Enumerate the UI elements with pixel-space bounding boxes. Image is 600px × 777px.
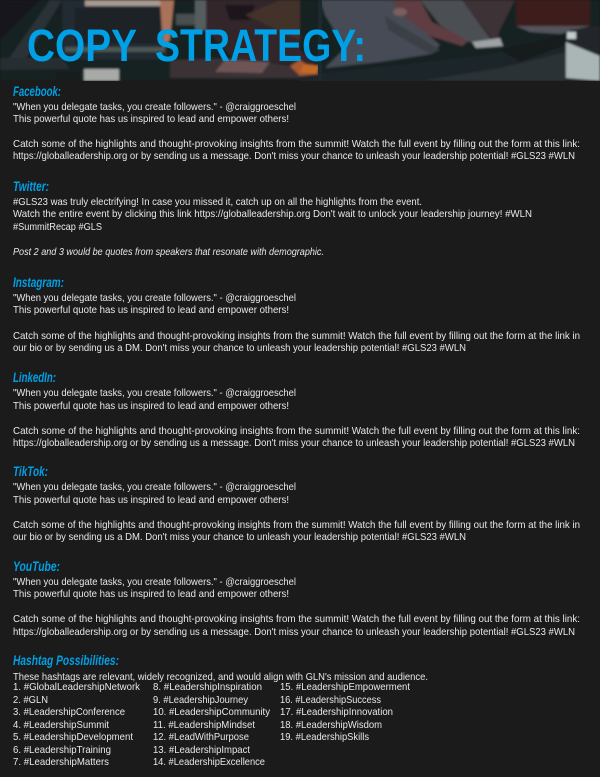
section: TikTok: "When you delegate tasks, you create followers." - @craiggroeschel — [13, 482, 296, 493]
hashtag list: column 2: 11. #LeadershipMindset — [153, 720, 255, 731]
hashtag list: column 2 — [153, 682, 271, 768]
section: Instagram: Catch some of the highlights and thought-provoking insights from the summit! Watch the full event by filling out the form at the link in — [13, 331, 580, 342]
section: Twitter: Twitter: — [13, 178, 49, 194]
section: hashtag possibilities — [13, 652, 428, 768]
section: Instagram: "When you delegate tasks, you create followers." - @craiggroeschel — [13, 293, 296, 304]
hashtag list: column 2: 12. #LeadWithPurpose — [153, 732, 249, 743]
hashtag list: column 1: 5. #LeadershipDevelopment — [13, 732, 133, 743]
section: Instagram — [13, 274, 580, 354]
section: TikTok: our bio or by sending us a DM. Don't miss your chance to unleash your leadership potential! #GLS23 #WLN — [13, 532, 466, 543]
section: Facebook: This powerful quote has us inspired to lead and empower others! — [13, 114, 289, 125]
section: Twitter: #GLS23 was truly electrifying! In case you missed it, catch up on all the highlights from the event. — [13, 197, 422, 208]
section: LinkedIn: "When you delegate tasks, you create followers." - @craiggroeschel — [13, 388, 296, 399]
section: Twitter — [13, 178, 532, 258]
title: STRATEGY: — [155, 20, 366, 71]
section: LinkedIn: LinkedIn: — [13, 369, 56, 385]
section: LinkedIn — [13, 369, 580, 449]
header: aerial city photo — [0, 0, 600, 81]
hashtag list: column 1: 3. #LeadershipConference — [13, 707, 125, 718]
section: YouTube: YouTube: — [13, 558, 60, 574]
hashtag list: column 2: 14. #LeadershipExcellence — [153, 757, 265, 768]
section: Facebook: Catch some of the highlights and thought-provoking insights from the summit! Watch the full event by filling out the form at this link: — [13, 139, 580, 150]
section: TikTok: TikTok: — [13, 463, 48, 479]
title: COPY — [27, 20, 137, 71]
section: YouTube: https://globalleadership.org or by sending us a message. Don't miss your chance to unleash your leadership potential! #GLS23 #WLN — [13, 627, 575, 638]
hashtag list: column 3: 17. #LeadershipInnovation — [280, 707, 393, 718]
section: Instagram: our bio or by sending us a DM. Don't miss your chance to unleash your leadership potential! #GLS23 #WLN — [13, 343, 466, 354]
hashtag list: column 1: 6. #LeadershipTraining — [13, 745, 111, 756]
section: Instagram: Instagram: — [13, 274, 64, 290]
section: YouTube: This powerful quote has us inspired to lead and empower others! — [13, 589, 289, 600]
hashtag list: column 1: 7. #LeadershipMatters — [13, 757, 109, 768]
section: YouTube: "When you delegate tasks, you create followers." - @craiggroeschel — [13, 577, 296, 588]
section: Facebook: "When you delegate tasks, you create followers." - @craiggroeschel — [13, 102, 296, 113]
section: LinkedIn: https://globalleadership.org or by sending us a message. Don't miss your chance to unleash your leadership potential! #GLS23 #WLN — [13, 438, 575, 449]
section: TikTok: This powerful quote has us inspired to lead and empower others! — [13, 495, 289, 506]
section: Twitter: #SummitRecap #GLS — [13, 222, 102, 233]
section: Facebook: https://globalleadership.org or by sending us a message. Don't miss your chance to unleash your leadership potential! #GLS23 #WLN — [13, 151, 575, 162]
section: Twitter: Watch the entire event by clicking this link https://globalleadership.org Don't wait to unlock your leadership journey! #WLN — [13, 209, 532, 220]
hashtag list: column 3 — [280, 682, 410, 743]
hashtag list: column 1: 1. #GlobalLeadershipNetwork — [13, 682, 141, 693]
section: hashtag possibilities: These hashtags are relevant, widely recognized, and would align with GLN's mission and audience. — [13, 672, 428, 683]
section: LinkedIn: Catch some of the highlights and thought-provoking insights from the summit! Watch the full event by filling out the form at this link: — [13, 426, 580, 437]
hashtag list: column 3: 16. #LeadershipSuccess — [280, 695, 381, 706]
section: Facebook: Facebook: — [13, 83, 61, 99]
hashtag list: column 1: 4. #LeadershipSummit — [13, 720, 109, 731]
hashtag list: column 3: 15. #LeadershipEmpowerment — [280, 682, 410, 693]
hashtag list: column 2: 13. #LeadershipImpact — [153, 745, 250, 756]
hashtag list: column 3: 18. #LeadershipWisdom — [280, 720, 382, 731]
section: TikTok: Catch some of the highlights and thought-provoking insights from the summit! Watch the full event by filling out the form at the link in — [13, 520, 580, 531]
section: YouTube: Catch some of the highlights and thought-provoking insights from the summit! Watch the full event by filling out the form at this link: — [13, 614, 580, 625]
section: Twitter: Post 2 and 3 would be quotes from speakers that resonate with demographic. — [13, 247, 324, 258]
section: TikTok — [13, 463, 580, 543]
section: Facebook — [13, 83, 580, 162]
hashtag list: column 2: 8. #LeadershipInspiration — [153, 682, 262, 693]
hashtag list: column 2: 10. #LeadershipCommunity — [153, 707, 271, 718]
section: LinkedIn: This powerful quote has us inspired to lead and empower others! — [13, 401, 289, 412]
hashtag list: column 1: 2. #GLN — [13, 695, 48, 706]
title — [27, 20, 366, 71]
section: Instagram: This powerful quote has us inspired to lead and empower others! — [13, 305, 289, 316]
section: hashtag possibilities: Hashtag Possibilities: — [13, 652, 119, 668]
section: YouTube — [13, 558, 580, 638]
hashtag list: column 2: 9. #LeadershipJourney — [153, 695, 249, 706]
hashtag list: column 3: 19. #LeadershipSkills — [280, 732, 369, 743]
hashtag list: column 1 — [13, 682, 141, 768]
